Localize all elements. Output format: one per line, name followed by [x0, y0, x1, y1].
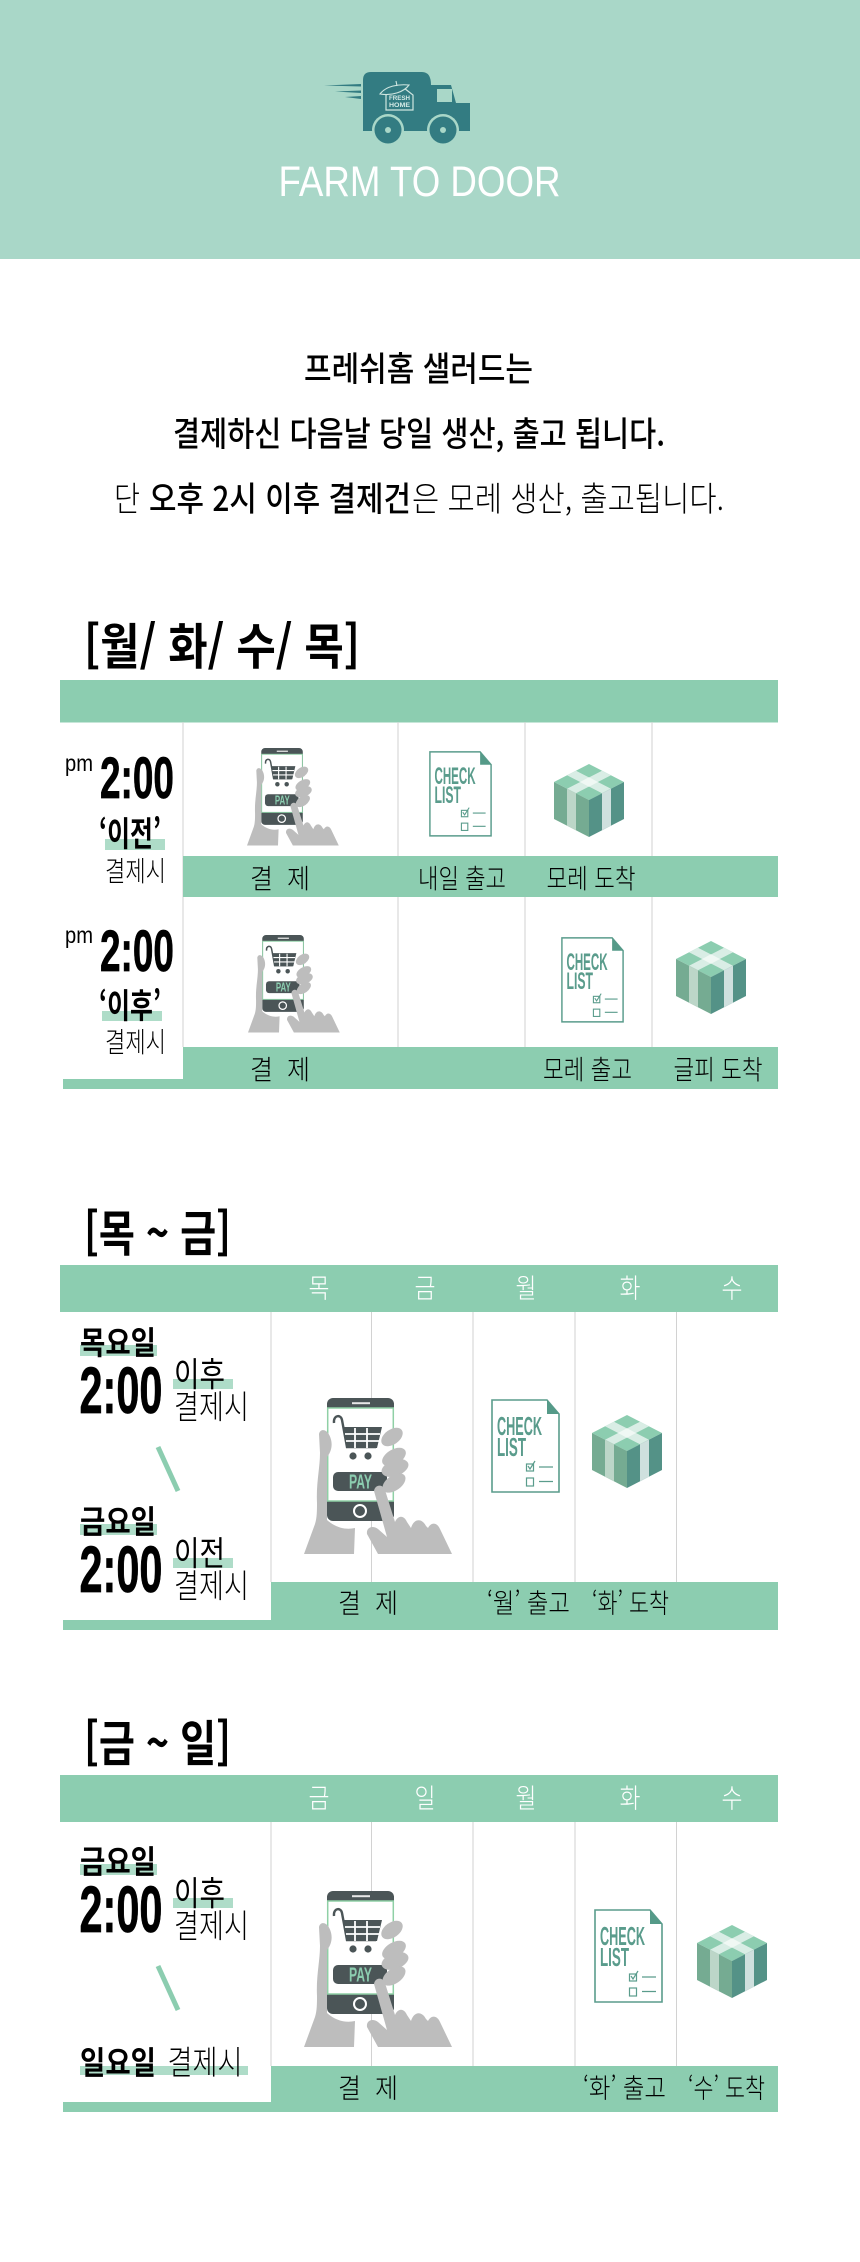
intro line 1: 프레쉬홈 샐러드는 — [304, 342, 533, 391]
icon: checklist: CHECK — [434, 764, 476, 790]
icon: package — [676, 941, 746, 1014]
intro line 3 — [114, 472, 724, 521]
label: friday before 2:00 — [80, 1497, 249, 1608]
label: thursday after 2:00: 결제시 — [174, 1380, 249, 1428]
header band with days: 화 — [620, 1267, 640, 1306]
label: sunday — [80, 2036, 248, 2084]
result band: ‘수’ 도착 — [688, 2067, 765, 2106]
panel: thu-fri schedule — [60, 1195, 778, 1630]
label: friday after 2:00: 이후 — [174, 1866, 225, 1916]
row 2 label: after 2pm: 결제시 — [105, 1021, 166, 1061]
icon: package — [697, 1925, 767, 1998]
intro line 2: 결제하신 다음날 당일 생산, 출고 됩니다. — [173, 407, 665, 456]
icon: checklist — [430, 752, 491, 836]
icon: checklist: CHECK — [566, 950, 608, 976]
result band: 결 제 — [338, 2067, 398, 2106]
slash divider — [158, 1966, 178, 2010]
icon: delivery truck — [324, 72, 470, 146]
header band with days: 월 — [516, 1267, 536, 1306]
row 1 label: before 2pm: ‘이전’ — [99, 807, 161, 856]
header band with days: 수 — [722, 1267, 742, 1306]
icon: checklist: LIST — [566, 969, 593, 995]
result band: ‘월’ 출고 — [487, 1582, 570, 1621]
icon: checklist: LIST — [497, 1432, 526, 1462]
label: friday after 2:00 — [80, 1837, 249, 1948]
label: friday after 2:00: 결제시 — [174, 1900, 249, 1948]
header band with days — [60, 1265, 778, 1312]
row 2 result band: 모레 출고 — [543, 1048, 632, 1088]
icon: checklist — [492, 1400, 559, 1492]
icon: delivery truck: FRESH — [389, 95, 410, 102]
label: thursday after 2:00 — [80, 1318, 249, 1428]
icon: checklist: CHECK — [497, 1411, 542, 1441]
intro line 3: 단 — [114, 472, 140, 521]
row 1 label: before 2pm: pm — [65, 750, 93, 776]
row 2 label: after 2pm — [65, 919, 174, 1061]
row 1 result band: 내일 출고 — [418, 858, 506, 896]
icon: phone payment — [248, 935, 340, 1032]
intro line 3: 은 모레 생산, 출고됩니다. — [412, 472, 724, 521]
label: friday before 2:00: 결제시 — [174, 1560, 249, 1608]
row 1 label: before 2pm: 2:00 — [100, 746, 174, 811]
intro text — [114, 342, 724, 521]
label: thursday after 2:00: 2:00 — [80, 1353, 162, 1427]
result band: 결 제 — [338, 1582, 398, 1621]
result band — [63, 2066, 778, 2112]
label: friday before 2:00: 이전 — [174, 1526, 225, 1576]
icon: delivery truck: HOME — [389, 102, 411, 109]
icon: checklist: LIST — [600, 1942, 629, 1972]
header band with days: 수 — [722, 1777, 742, 1816]
result band: ‘화’ 출고 — [583, 2067, 666, 2106]
label: friday after 2:00: 금요일 — [80, 1837, 156, 1883]
icon: checklist: CHECK — [600, 1921, 645, 1951]
header band with days: 화 — [620, 1777, 640, 1816]
icon: phone payment: PAY — [276, 981, 291, 995]
row 1 result band — [183, 856, 778, 897]
icon: phone payment — [304, 1891, 452, 2047]
panel: mon-thu schedule — [60, 608, 778, 1089]
heading: thu to fri: [목 ~ 금] — [84, 1195, 231, 1266]
icon: package — [554, 764, 624, 837]
icon: phone payment — [304, 1398, 452, 1554]
header band — [60, 680, 778, 722]
label: friday before 2:00: 2:00 — [80, 1532, 162, 1606]
header band with days: 월 — [516, 1777, 536, 1816]
slash divider — [158, 1447, 178, 1491]
header band with days: 목 — [308, 1267, 330, 1306]
label: thursday after 2:00: 목요일 — [80, 1318, 156, 1364]
row 1 result band: 모레 도착 — [546, 858, 636, 896]
heading: mon tue wed thu: [월/ 화/ 수/ 목] — [84, 608, 360, 679]
panel: fri-sun schedule — [60, 1705, 778, 2112]
heading: fri to sun: [금 ~ 일] — [84, 1705, 231, 1776]
header band with days: 일 — [414, 1777, 436, 1816]
row 1 label: before 2pm — [65, 746, 174, 890]
icon: package — [592, 1415, 662, 1488]
label: friday after 2:00: 2:00 — [80, 1872, 162, 1946]
row 2 result band: 결 제 — [250, 1048, 310, 1088]
label: thursday after 2:00: 이후 — [174, 1348, 225, 1396]
header band with days: 금 — [308, 1777, 330, 1816]
row 1 label: before 2pm: 결제시 — [105, 850, 166, 890]
result band — [63, 1582, 778, 1630]
icon: checklist — [562, 938, 623, 1022]
row 2 label: after 2pm: 2:00 — [100, 919, 174, 984]
icon: phone payment: PAY — [275, 794, 290, 808]
row 2 label: after 2pm: ‘이후’ — [99, 979, 161, 1028]
icon: checklist — [595, 1910, 662, 2002]
label: sunday: 일요일 — [80, 2038, 156, 2084]
row 2 result band — [63, 1047, 778, 1089]
icon: phone payment: PAY — [349, 1964, 372, 1986]
icon: checklist: LIST — [434, 783, 461, 809]
icon: phone payment — [247, 748, 339, 846]
header band — [0, 0, 860, 259]
label: sunday: 결제시 — [168, 2036, 242, 2084]
row 2 label: after 2pm: pm — [65, 922, 93, 948]
title: FARM TO DOOR: FARM TO DOOR — [278, 158, 560, 206]
intro line 3: 오후 2시 이후 결제건 — [149, 472, 411, 521]
row 2 result band: 글피 도착 — [674, 1048, 762, 1088]
header band with days — [60, 1775, 778, 1822]
result band: ‘화’ 도착 — [592, 1582, 669, 1621]
row 1 result band: 결 제 — [250, 858, 310, 896]
header band with days: 금 — [414, 1267, 436, 1306]
icon: phone payment: PAY — [349, 1472, 372, 1494]
label: friday before 2:00: 금요일 — [80, 1497, 156, 1543]
